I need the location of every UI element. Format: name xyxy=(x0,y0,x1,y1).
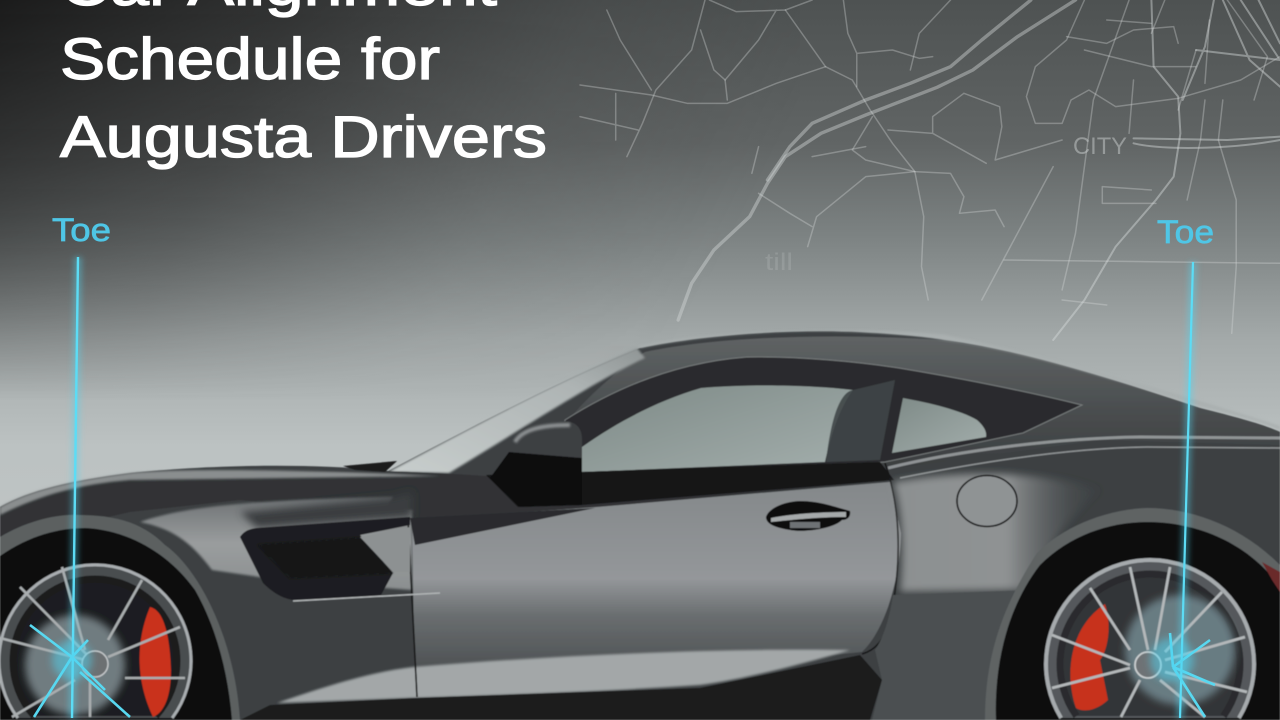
dark shoulder over fender xyxy=(240,492,412,528)
title: Schedule for xyxy=(60,27,440,92)
rear quarter panel xyxy=(893,474,1100,592)
front brake caliper xyxy=(140,607,171,717)
main window glass xyxy=(582,386,853,472)
car illustration xyxy=(0,331,1280,720)
rear brake caliper xyxy=(1070,604,1109,710)
windshield strip xyxy=(388,348,645,473)
faint map label: till xyxy=(765,249,793,276)
seat in window xyxy=(826,380,895,462)
front wheel xyxy=(0,565,191,718)
lower door highlight xyxy=(277,650,850,703)
front wheel arch and tyre xyxy=(0,515,240,720)
door seam lines xyxy=(408,463,898,697)
map city label: CITY xyxy=(1073,133,1127,160)
title xyxy=(60,0,547,170)
front hub xyxy=(82,651,108,677)
right wheel star xyxy=(1170,633,1215,717)
rear wheel arch and tyre xyxy=(985,508,1280,720)
front spokes xyxy=(0,567,185,717)
rear wheel xyxy=(1046,560,1254,718)
rear hub xyxy=(1135,652,1161,678)
right cyan alignment line xyxy=(1150,262,1215,718)
rear spokes xyxy=(1052,567,1247,717)
fender light panel xyxy=(140,497,412,590)
cowl vent xyxy=(343,461,397,472)
left cyan alignment line xyxy=(30,257,130,718)
black beltline xyxy=(486,462,894,507)
sill xyxy=(240,655,882,720)
title: Augusta Drivers xyxy=(60,105,547,170)
roof highlight xyxy=(640,331,1280,430)
rear shoulder lines xyxy=(888,437,1280,478)
fuel door xyxy=(957,476,1017,526)
dark wedge on door xyxy=(410,508,595,545)
right Toe label: Toe xyxy=(1157,214,1214,250)
door handle xyxy=(766,501,850,531)
window frame xyxy=(560,357,1082,480)
shoulder band xyxy=(0,462,894,545)
door panel xyxy=(412,482,901,697)
car body silhouette xyxy=(0,331,1280,720)
fender vent xyxy=(240,517,440,601)
rear side glass xyxy=(892,398,986,453)
roof panel xyxy=(560,336,1280,470)
hood highlight xyxy=(0,470,440,515)
street map line art xyxy=(580,0,1280,340)
rear lower panel xyxy=(872,590,1030,720)
left Toe label: Toe xyxy=(52,212,111,248)
left wheel star xyxy=(30,625,130,717)
side mirror xyxy=(490,421,582,507)
